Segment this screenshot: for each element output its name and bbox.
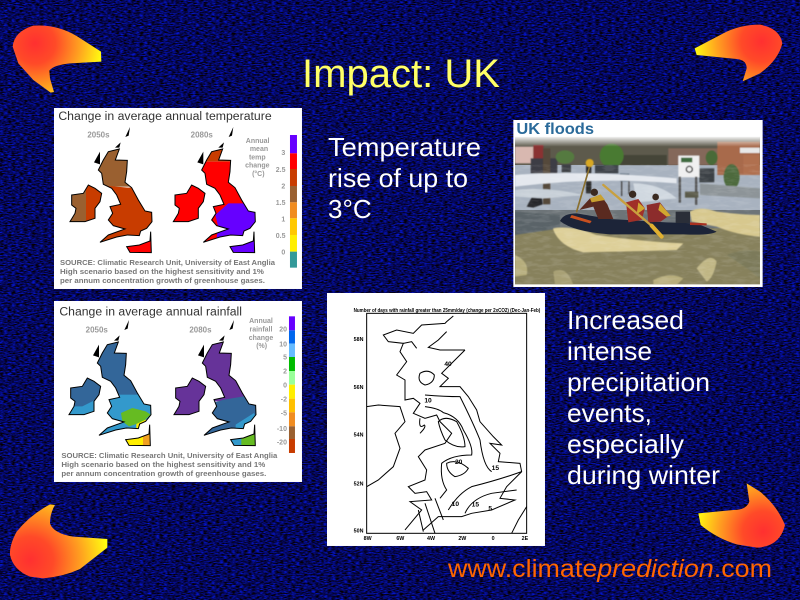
- map: temperature 2050s: [67, 127, 153, 255]
- text: increased precipitation: precipitation: [567, 367, 710, 397]
- contour value labels: 40: [444, 361, 452, 368]
- footer: website url: www.climate prediction .com: [447, 555, 772, 583]
- legend label: rainfall: change: [249, 335, 273, 342]
- tree trunk and posts: [543, 148, 550, 204]
- contour value labels: 15: [492, 465, 499, 472]
- axis labels: 0: [492, 536, 495, 542]
- text: temperature rise: rise of up to: [328, 163, 468, 193]
- text: increased precipitation: Increased: [567, 305, 684, 335]
- axis labels: 2W: [458, 536, 467, 542]
- legend: temperature colour scale: 0.5: [276, 233, 286, 240]
- legend label: temperature: Annual: [246, 138, 270, 145]
- source note: temperature: [60, 260, 275, 285]
- legend label: temperature: mean: [250, 146, 268, 153]
- legend: rainfall colour scale: 20: [279, 326, 287, 333]
- panel: rainfall change maps: [54, 301, 302, 482]
- precipitation contour lines: [418, 371, 522, 533]
- legend label: temperature: [245, 138, 270, 178]
- source note: rainfall: per annum concentration growth of greenhouse gases.: [61, 471, 266, 478]
- decorative swoosh: bottom left: [10, 504, 107, 578]
- legend: temperature colour scale: 1: [281, 217, 285, 224]
- decorative swoosh: top left: [13, 25, 101, 93]
- map: rainfall 2080s: 2080s: [189, 325, 212, 334]
- legend: temperature colour scale: 2.5: [276, 167, 286, 174]
- panel heading: temperature: Change in average annual temperature: [58, 109, 272, 123]
- legend: temperature colour scale: [276, 135, 297, 268]
- legend: rainfall colour scale: [277, 316, 295, 453]
- road sign: [678, 156, 699, 177]
- panel: temperature change maps: [54, 108, 302, 289]
- legend label: rainfall: [249, 318, 273, 350]
- axis labels: 56N: [354, 385, 364, 391]
- source note: rainfall: SOURCE: Climatic Research Unit, University of East Anglia: [61, 453, 277, 460]
- legend label: rainfall: Annual: [249, 318, 273, 325]
- map: temperature 2080s: [170, 127, 257, 255]
- title: Impact: UK: [302, 52, 500, 96]
- contour value labels: 20: [455, 459, 463, 466]
- contour value labels: 5: [488, 506, 492, 513]
- source note: temperature: SOURCE: Climatic Research Unit, University of East Anglia: [60, 260, 275, 267]
- text: increased precipitation: intense: [567, 336, 652, 366]
- axis labels: 6W: [396, 536, 405, 542]
- contour value labels: 10: [452, 501, 459, 508]
- text: increased precipitation: during winter: [567, 460, 720, 490]
- dark shoreline objects: [562, 164, 571, 172]
- contour chart title: Number of days with rainfall greater than 25mm/day (change per 2xCO2) (Dec-Jan-Feb): [354, 308, 540, 314]
- source note: temperature: per annum concentration growth of greenhouse gases.: [60, 278, 265, 285]
- legend: rainfall colour scale: -10: [277, 426, 287, 433]
- water highlights: [515, 173, 677, 187]
- flood photograph: [515, 137, 760, 285]
- legend: temperature colour scale: 1.5: [276, 200, 286, 207]
- photo panel: UK floods: [513, 120, 763, 287]
- legend: rainfall colour scale: 0: [283, 383, 287, 390]
- text: temperature rise: Temperature: [328, 132, 481, 162]
- header fade: [515, 136, 760, 147]
- panel: precipitation contour map: [327, 293, 545, 546]
- map: temperature 2080s: 2080s: [191, 130, 213, 139]
- legend label: rainfall: rainfall: [250, 327, 272, 334]
- legend: rainfall colour scale: -20: [277, 440, 287, 447]
- rescue crew: [579, 189, 671, 222]
- legend label: rainfall: (%): [256, 343, 267, 350]
- text: temperature rise: [328, 132, 481, 224]
- text: increased precipitation: events,: [567, 398, 652, 428]
- map: rainfall 2050s: [66, 320, 153, 448]
- buildings and trees: [515, 147, 533, 163]
- contour value labels: 15: [472, 502, 479, 509]
- source note: temperature: High scenario based on the highest sensitivity and 1%: [60, 269, 265, 276]
- legend: rainfall colour scale: 2: [283, 369, 287, 376]
- axis labels: 50N: [354, 528, 364, 534]
- source note: rainfall: High scenario based on the highest sensitivity and 1%: [61, 462, 266, 469]
- oars: [577, 168, 662, 237]
- photo heading: UK floods: [516, 121, 594, 138]
- legend: rainfall colour scale: 5: [283, 355, 287, 362]
- coastline: [367, 316, 527, 533]
- legend: temperature colour scale: 0: [281, 250, 285, 257]
- source note: rainfall: [61, 453, 277, 478]
- legend label: temperature: change: [245, 163, 270, 170]
- text: increased precipitation: [567, 305, 720, 490]
- text: temperature rise: 3°C: [328, 194, 372, 224]
- chart frame: [367, 313, 527, 533]
- axis labels: 58N: [354, 337, 364, 343]
- legend: temperature colour scale: 2: [281, 184, 285, 191]
- legend: rainfall colour scale: -2: [281, 397, 287, 404]
- axis labels: [354, 337, 529, 542]
- legend label: temperature: (°C): [252, 170, 265, 178]
- axis labels: 52N: [354, 481, 364, 487]
- axis labels: 4W: [427, 536, 436, 542]
- panel heading: rainfall: Change in average annual rainfall: [59, 305, 242, 319]
- legend: rainfall colour scale: -5: [281, 410, 287, 417]
- axis labels: 8W: [364, 536, 373, 542]
- contour value labels: 10: [424, 398, 432, 405]
- legend: temperature colour scale: 3: [281, 150, 285, 157]
- legend label: temperature: temp: [249, 154, 266, 161]
- contour value labels: [424, 361, 499, 513]
- map: rainfall 2050s: 2050s: [86, 325, 108, 334]
- map: rainfall 2080s: [171, 320, 258, 448]
- wake and foam: [553, 227, 683, 252]
- axis labels: 2E: [522, 536, 529, 542]
- text: increased precipitation: especially: [567, 429, 684, 459]
- map: temperature 2050s: 2050s: [87, 130, 110, 139]
- axis labels: 54N: [354, 433, 364, 439]
- legend: rainfall colour scale: 10: [279, 341, 287, 348]
- decorative swoosh: bottom right: [698, 483, 785, 548]
- inflatable rescue boat: [560, 212, 717, 235]
- decorative swoosh: top right: [695, 25, 782, 81]
